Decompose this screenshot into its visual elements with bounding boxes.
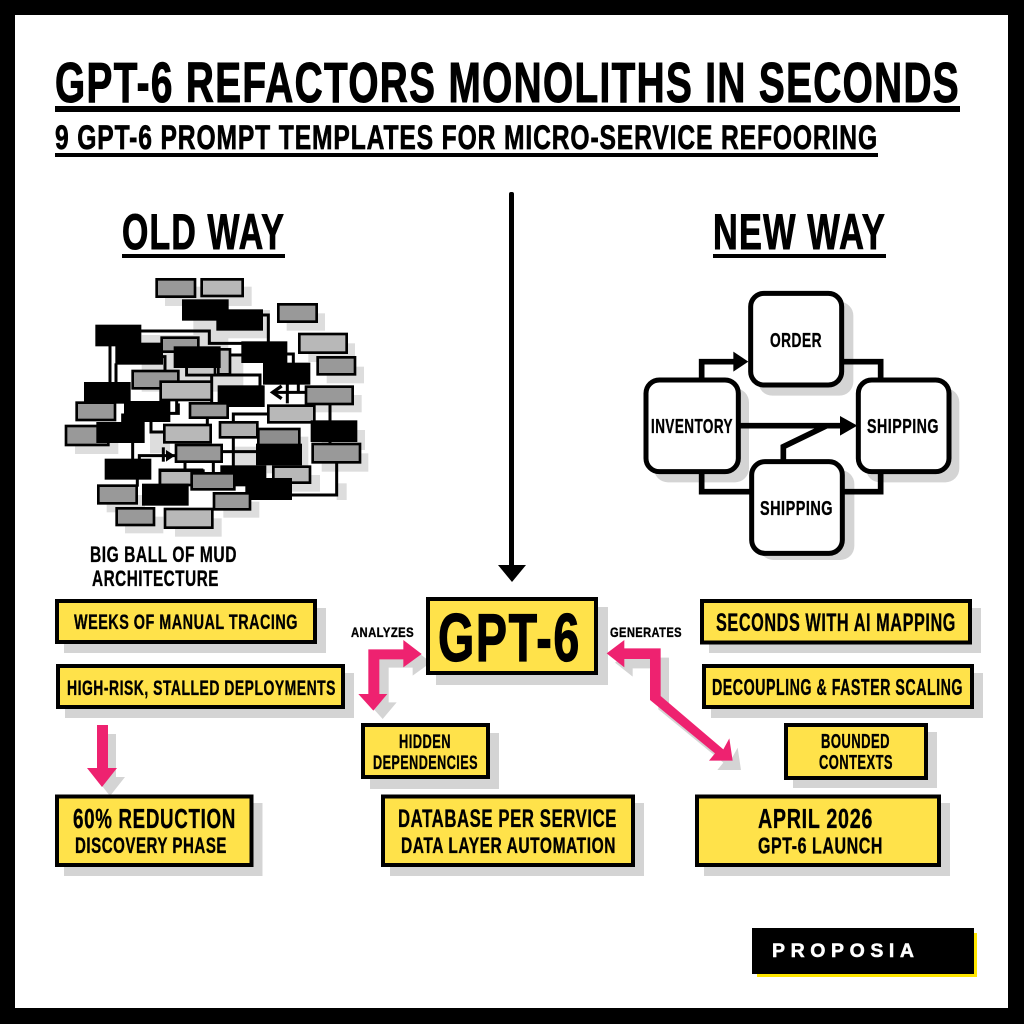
callout: seconds with ai mapping xyxy=(702,601,981,653)
callout: hidden dependencies xyxy=(363,725,499,789)
caption: big ball of mud: BIG BALL OF MUD xyxy=(90,542,237,567)
arrow: central vertical xyxy=(498,192,526,582)
label: analyzes: ANALYZES xyxy=(351,624,414,640)
arrow: analyzes xyxy=(358,640,431,719)
stat: 60% reduction xyxy=(57,796,262,876)
brand badge: proposia xyxy=(752,928,977,977)
service label: shipping right: SHIPPING xyxy=(867,416,939,438)
diagram: big ball of mud xyxy=(66,279,368,537)
callout: weeks of manual tracing: WEEKS OF MANUAL TRACING xyxy=(74,611,298,634)
callout: bounded contexts xyxy=(786,725,937,788)
brand badge: proposia: PROPOSIA xyxy=(772,940,914,962)
callout: bounded contexts: BOUNDED xyxy=(821,731,890,753)
heading: old way: OLD WAY xyxy=(122,204,285,260)
service label: inventory: INVENTORY xyxy=(651,416,733,438)
callout: high-risk deployments xyxy=(58,666,354,718)
caption: big ball of mud: ARCHITECTURE xyxy=(92,566,219,591)
arrow: down to reduction xyxy=(87,725,125,796)
callout: hidden dependencies: HIDDEN xyxy=(399,732,451,753)
callout: hidden dependencies: DEPENDENCIES xyxy=(373,753,478,774)
diagram: microservices xyxy=(646,293,959,560)
stat: april 2026 launch: APRIL 2026 xyxy=(758,803,873,834)
caption: big ball of mud xyxy=(90,542,237,591)
stat: april 2026 launch: GPT-6 LAUNCH xyxy=(758,832,883,858)
callout: high-risk deployments: HIGH-RISK, STALLED DEPLOYMENTS xyxy=(67,677,336,700)
stat: 60% reduction: DISCOVERY PHASE xyxy=(75,833,227,858)
service label: order: ORDER xyxy=(770,330,822,352)
heading: old way xyxy=(122,204,285,260)
stat: april 2026 launch xyxy=(697,796,950,876)
hub: GPT-6: GPT-6 xyxy=(438,600,581,676)
stat: 60% reduction: 60% REDUCTION xyxy=(73,803,236,834)
callout: weeks of manual tracing xyxy=(57,601,326,653)
label: generates: GENERATES xyxy=(610,624,682,640)
heading: new way xyxy=(713,204,886,260)
callout: database per service xyxy=(383,796,644,876)
callout: database per service: DATABASE PER SERVICE xyxy=(398,805,617,833)
heading: new way: NEW WAY xyxy=(713,204,886,260)
callout: decoupling xyxy=(704,666,983,718)
arrow: generates xyxy=(607,640,741,770)
callout: database per service: DATA LAYER AUTOMATION xyxy=(401,833,616,858)
service label: shipping bottom: SHIPPING xyxy=(760,498,833,520)
callout: bounded contexts: CONTEXTS xyxy=(819,752,893,774)
